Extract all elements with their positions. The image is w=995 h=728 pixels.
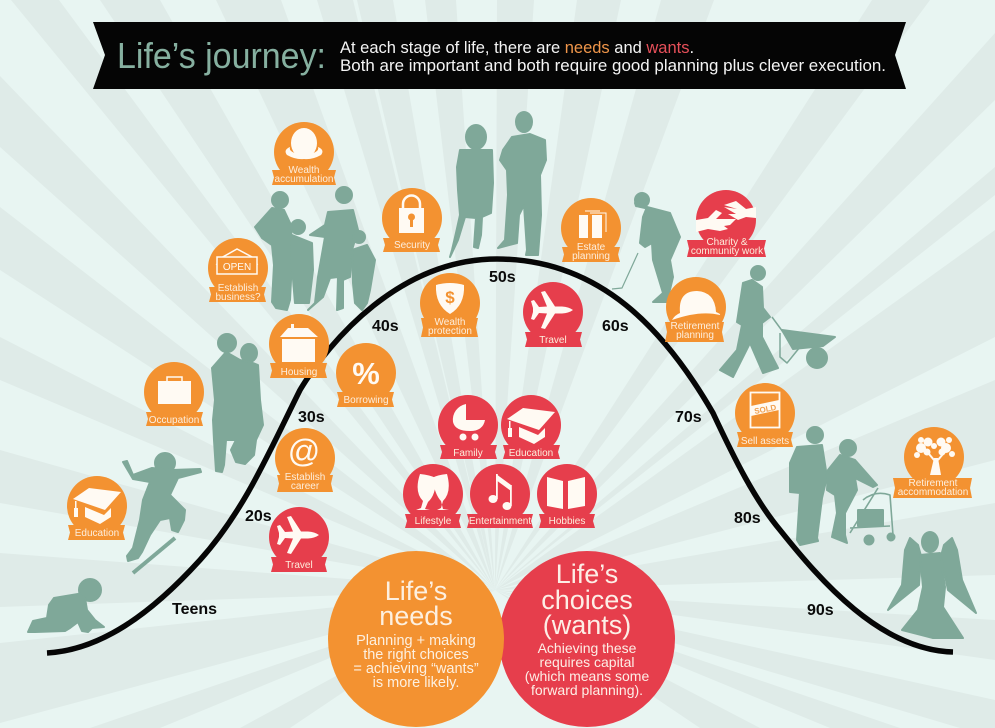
icon: documents (579, 211, 606, 238)
age labels: 50s (489, 269, 516, 286)
intro text: At each stage of life, there are needs and wants. (340, 39, 694, 57)
badge: housing (269, 314, 329, 378)
heading: life's choices: choices (541, 585, 633, 615)
badge: establish career: career (291, 481, 320, 492)
heading: life's choices: Life’s (556, 559, 618, 589)
badge: sell assets: Sell assets (741, 436, 789, 447)
icon: airplane (531, 291, 573, 329)
badge: family (438, 395, 498, 459)
age labels: 70s (675, 409, 702, 426)
text: needs description: Planning + making (356, 633, 476, 649)
badge: education choices (501, 395, 561, 459)
badge: travel (choices side) (523, 282, 583, 347)
heading: life's choices (541, 559, 633, 640)
icon: open book (547, 477, 585, 509)
icon: sun hat (672, 291, 720, 320)
age labels: 80s (734, 510, 761, 527)
silhouette: business couple (450, 112, 546, 257)
silhouette: family (255, 187, 375, 310)
icon: airplane (277, 516, 319, 554)
badge: retirement accommodation (893, 427, 972, 498)
badge: estate planning: planning (572, 251, 610, 262)
text: wants description: requires capital (540, 654, 634, 670)
intro text (340, 39, 886, 75)
intro text: Both are important and both require good planning plus clever execution. (340, 57, 886, 75)
icon: percent: % (352, 356, 380, 391)
icon: wine glasses (416, 474, 449, 510)
silhouette: baby crawling (28, 579, 104, 632)
circle: life's needs (328, 551, 504, 727)
badge: occupation (144, 362, 204, 426)
badge: charity and community work (687, 190, 766, 257)
badge: retirement accommodation: accommodation (898, 487, 968, 498)
badge: entertainment (467, 464, 533, 528)
age labels: Teens (172, 601, 217, 618)
icon: open sign: OPEN (223, 262, 251, 273)
badge: lifestyle (403, 464, 463, 528)
badge: travel (choices side): Travel (539, 335, 567, 346)
heading: life's needs: Life’s (385, 576, 447, 606)
icon: padlock (399, 196, 424, 233)
text: needs description: the right choices (363, 647, 469, 663)
badge: establish business: business? (215, 292, 261, 303)
silhouette: angel (888, 532, 976, 638)
badge: sell assets (735, 383, 795, 447)
badge: education choices: Education (509, 448, 553, 459)
heading: life's needs (379, 576, 453, 631)
badge: establish career: Establish (285, 472, 325, 483)
icon: sold sign: SOLD (754, 403, 777, 416)
badge: wealth protection: Wealth (435, 317, 465, 328)
icon: pram (453, 404, 485, 440)
badge: wealth protection: protection (428, 326, 472, 337)
text: needs description: = achieving “wants” (353, 661, 479, 677)
badge: education needs (67, 476, 127, 540)
badge: establish business: Establish (218, 283, 258, 294)
badge: charity and community work: Charity & (706, 237, 748, 248)
silhouette: skateboarder (123, 453, 201, 573)
silhouette: golfer (612, 193, 680, 302)
badge: establish business (208, 238, 268, 303)
icon: at sign: @ (288, 433, 320, 469)
icon: graduation cap (507, 408, 555, 444)
heading: life's choices: (wants) (543, 610, 631, 640)
badge: charity and community work: community work (691, 246, 764, 257)
header banner (93, 22, 906, 89)
age labels: 40s (372, 318, 399, 335)
badge: retirement planning (665, 277, 726, 342)
badge: security (382, 188, 442, 252)
text: wants description: (which means some (525, 668, 649, 684)
badge: wealth protection (420, 273, 480, 337)
badge: retirement planning: Retirement (671, 321, 720, 332)
text: wants description: Achieving these (538, 640, 637, 656)
text: needs description: is more likely. (373, 675, 459, 691)
badge: retirement accommodation: Retirement (909, 478, 958, 489)
badge: security: Security (394, 240, 430, 251)
icon: briefcase (158, 377, 191, 404)
icon: music notes (488, 474, 512, 510)
badge: travel (needs side) (269, 507, 329, 572)
title: Life’s journey: (117, 35, 326, 76)
circle: life's choices (wants) (499, 551, 675, 727)
badge: lifestyle: Lifestyle (415, 516, 452, 527)
badge: wealth accumulation (272, 122, 336, 185)
badge: wealth accumulation: accumulation (275, 174, 333, 185)
badge: establish career (275, 428, 335, 492)
badge: estate planning: Estate (577, 242, 606, 253)
silhouette: elderly couple with walker (790, 427, 894, 545)
badge: occupation: Occupation (149, 415, 199, 426)
age labels: 20s (245, 508, 272, 525)
badge: entertainment: Entertainment (469, 516, 531, 527)
badge: retirement planning: planning (676, 330, 714, 341)
icon: house (280, 324, 318, 362)
age labels (172, 269, 834, 619)
age labels: 30s (298, 409, 325, 426)
icon: nest egg (286, 128, 322, 159)
badge: borrowing: Borrowing (343, 395, 389, 406)
silhouette: man with wheelbarrow (720, 266, 835, 377)
text: wants description (525, 640, 649, 698)
badge: borrowing (336, 343, 396, 407)
badge: estate planning (561, 198, 621, 262)
badge: wealth accumulation: Wealth (289, 165, 319, 176)
badge: hobbies (537, 464, 597, 528)
age labels: 90s (807, 602, 834, 619)
silhouette: young couple (212, 334, 263, 472)
badge: housing: Housing (281, 367, 317, 378)
text: needs description (353, 633, 479, 691)
icon: reaching hands (696, 201, 756, 232)
text: wants description: forward planning). (531, 682, 643, 698)
icon: graduation cap (73, 488, 121, 524)
badge: hobbies: Hobbies (549, 516, 585, 527)
age labels: 60s (602, 318, 629, 335)
heading: life's needs: needs (379, 601, 453, 631)
badge: travel (needs side): Travel (285, 560, 313, 571)
icon: tree (914, 437, 955, 475)
life curve (47, 259, 953, 653)
icon: shield with dollar: $ (445, 288, 455, 307)
badge: family: Family (453, 448, 483, 459)
badge: education needs: Education (75, 528, 119, 539)
